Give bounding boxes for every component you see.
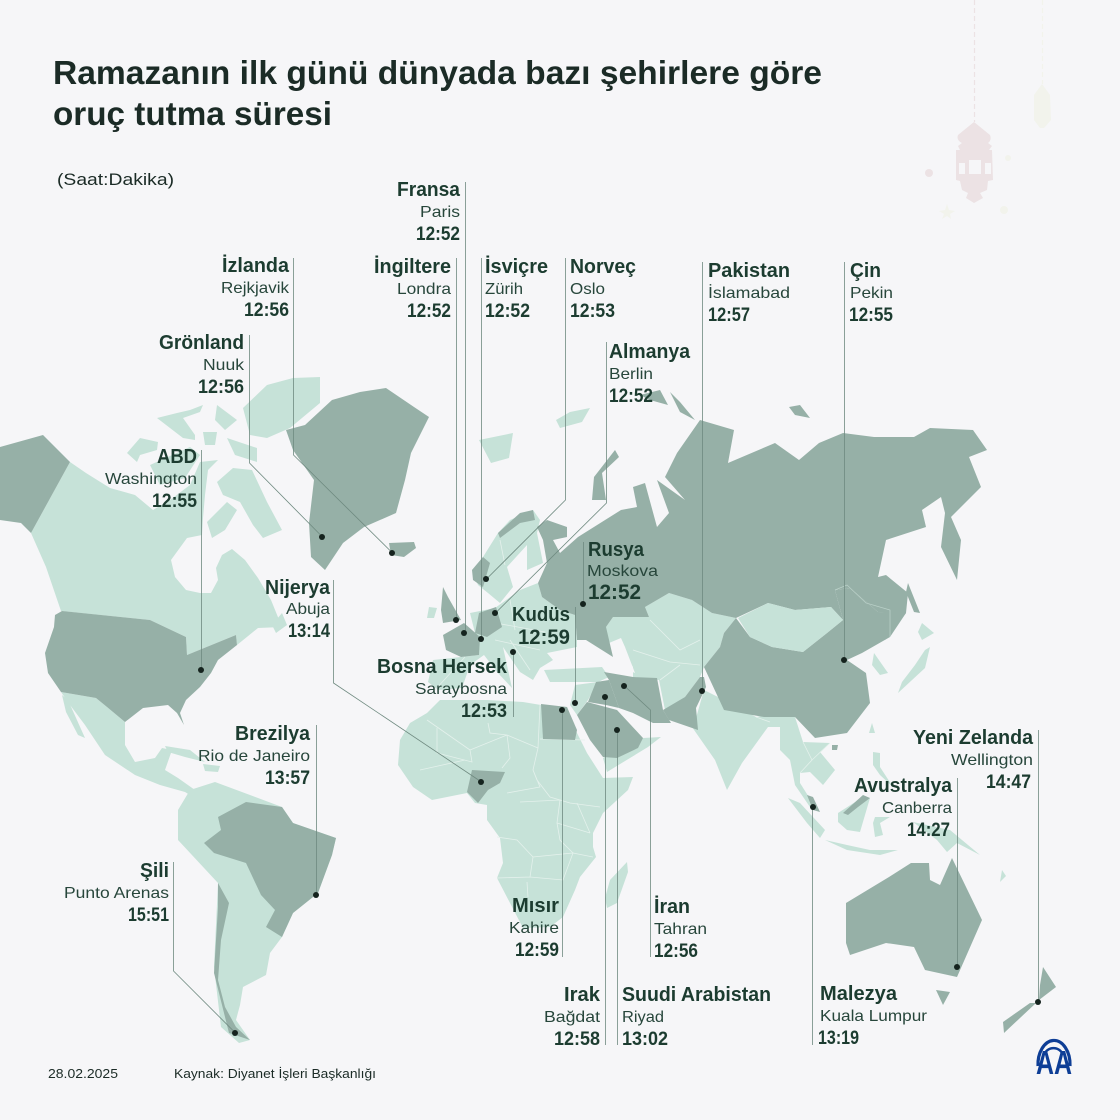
label: İsviçre: İsviçre xyxy=(485,255,548,278)
map: light countries xyxy=(31,377,1006,1043)
label: Suudi Arabistan: 13:02 xyxy=(622,1029,668,1050)
label: Brezilya: Brezilya xyxy=(235,723,311,745)
label: Şili: Şili xyxy=(140,860,169,882)
label: Şili xyxy=(64,860,169,926)
footer: date: 28.02.2025 xyxy=(48,1066,118,1081)
world map xyxy=(0,377,1056,1043)
label: Nijerya: Nijerya xyxy=(265,577,331,599)
label: İran: İran xyxy=(654,895,690,918)
decoration: lanterns xyxy=(925,0,1051,219)
label: Malezya: Kuala Lumpur xyxy=(820,1008,928,1025)
label: Pakistan: İslamabad xyxy=(708,283,790,302)
label: Bosna Hersek xyxy=(377,656,508,722)
map: highlighted countries xyxy=(0,388,1056,1040)
label: Fransa: Fransa xyxy=(397,179,461,201)
label: Avustralya: 14:27 xyxy=(907,820,950,841)
label: Irak: Bağdat xyxy=(544,1009,601,1026)
label: Pakistan xyxy=(708,260,790,326)
label: Irak: Irak xyxy=(564,984,601,1006)
label: Mısır: 12:59 xyxy=(515,940,559,961)
label: Norveç xyxy=(570,256,636,322)
label: Mısır: Kahire xyxy=(509,920,559,937)
logo: AA: AA xyxy=(1036,1044,1072,1081)
label: ABD: Washington xyxy=(105,471,197,488)
label: Kudüs: Kudüs xyxy=(512,604,570,626)
city dots xyxy=(198,534,1041,1036)
label: Fransa: Paris xyxy=(420,204,460,221)
label: Malezya: Malezya xyxy=(820,983,898,1005)
map: caspian sea xyxy=(609,638,635,673)
label: Çin: Pekin xyxy=(850,285,893,302)
label: Yeni Zelanda: Yeni Zelanda xyxy=(913,727,1034,749)
label: Brezilya: Rio de Janeiro xyxy=(198,748,310,765)
label: Almanya: Berlin xyxy=(609,366,653,383)
label: Mısır xyxy=(509,895,559,961)
label: Norveç: Norveç xyxy=(570,256,636,278)
label: Bosna Hersek: Bosna Hersek xyxy=(377,656,508,678)
label: İngiltere: İngiltere xyxy=(374,255,451,278)
label: İsviçre: 12:52 xyxy=(485,301,530,322)
label: Grönland: Grönland xyxy=(159,332,244,354)
label: Pakistan: 12:57 xyxy=(708,305,750,326)
label: Grönland xyxy=(159,332,245,398)
label: Irak: 12:58 xyxy=(554,1029,600,1050)
title: Ramazanın ilk günü dünyada bazı şehirlere göre xyxy=(53,54,822,91)
label: İsviçre xyxy=(485,255,548,322)
label: Norveç: 12:53 xyxy=(570,301,615,322)
label: Almanya: 12:52 xyxy=(609,386,653,407)
label: Yeni Zelanda xyxy=(913,727,1034,793)
label: Şili: Punto Arenas xyxy=(64,885,169,902)
label: Şili: 15:51 xyxy=(128,905,169,926)
label: Fransa xyxy=(397,179,461,245)
label: Avustralya: Canberra xyxy=(882,800,952,817)
label: Rusya: Moskova xyxy=(587,563,658,580)
label: Yeni Zelanda: 14:47 xyxy=(986,772,1031,793)
label: ABD xyxy=(105,446,197,512)
label: Nijerya: 13:14 xyxy=(288,621,330,642)
label: İngiltere xyxy=(374,255,451,322)
label: Bosna Hersek: 12:53 xyxy=(461,701,507,722)
label: İran: Tahran xyxy=(654,921,707,938)
title xyxy=(53,54,822,132)
label: İzlanda: Rejkjavik xyxy=(221,280,290,297)
map: internal borders xyxy=(420,540,830,897)
label: Bosna Hersek: Saraybosna xyxy=(415,681,507,698)
label: Malezya xyxy=(818,983,928,1049)
label: Irak xyxy=(544,984,601,1050)
label: Rusya xyxy=(587,539,658,604)
label: Pakistan: Pakistan xyxy=(708,260,790,282)
label: Suudi Arabistan: Suudi Arabistan xyxy=(622,984,771,1006)
label: Almanya xyxy=(609,341,691,407)
label: Brezilya: 13:57 xyxy=(265,768,310,789)
label: Grönland: Nuuk xyxy=(203,357,245,374)
label: Fransa: 12:52 xyxy=(416,224,460,245)
label: Mısır: Mısır xyxy=(512,895,559,917)
label: Kudüs xyxy=(512,604,570,649)
label: Suudi Arabistan xyxy=(622,984,771,1050)
title: oruç tutma süresi xyxy=(53,95,332,132)
label: Nijerya: Abuja xyxy=(286,601,330,618)
label: Yeni Zelanda: Wellington xyxy=(951,752,1033,769)
label: Grönland: 12:56 xyxy=(198,377,244,398)
label: Suudi Arabistan: Riyad xyxy=(622,1009,664,1026)
label: Almanya: Almanya xyxy=(609,341,691,363)
label: ABD: 12:55 xyxy=(152,491,197,512)
map: russia-china border xyxy=(835,585,890,637)
label: İzlanda xyxy=(221,254,290,321)
label: Avustralya xyxy=(854,775,953,841)
label: Avustralya: Avustralya xyxy=(854,775,953,797)
label: Çin xyxy=(849,260,893,326)
label: Kudüs: 12:59 xyxy=(518,626,570,649)
label: Norveç: Oslo xyxy=(570,281,605,298)
map: mongolia xyxy=(738,603,843,652)
label: İzlanda: 12:56 xyxy=(244,300,289,321)
label: İsviçre: Zürih xyxy=(485,281,523,298)
label: Rusya: 12:52 xyxy=(588,581,641,604)
label: Çin: 12:55 xyxy=(849,305,893,326)
subtitle: unit: (Saat:Dakika) xyxy=(57,170,174,189)
label: İngiltere: Londra xyxy=(397,281,451,298)
label: ABD: ABD xyxy=(157,446,197,468)
label: İran: 12:56 xyxy=(654,941,698,962)
leader lines xyxy=(174,182,1038,1045)
label: Nijerya xyxy=(265,577,331,642)
label: İran xyxy=(654,895,707,962)
label: İzlanda: İzlanda xyxy=(222,254,290,277)
label: Malezya: 13:19 xyxy=(818,1028,859,1049)
label: Brezilya xyxy=(198,723,311,789)
label: İngiltere: 12:52 xyxy=(407,301,451,322)
label: Çin: Çin xyxy=(850,260,881,282)
footer: source: Kaynak: Diyanet İşleri Başkanlığı xyxy=(174,1066,376,1081)
label: Rusya: Rusya xyxy=(588,539,645,561)
